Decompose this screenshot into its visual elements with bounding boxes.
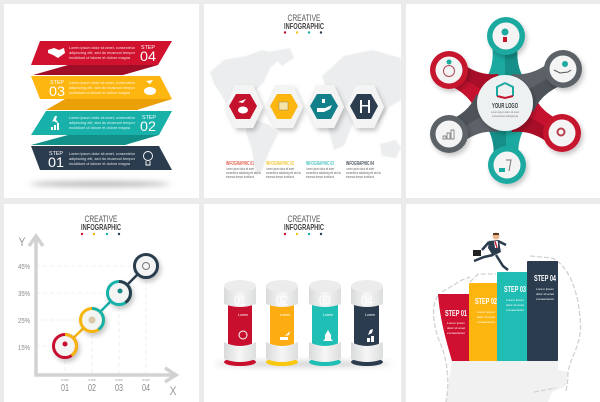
y-axis values	[18, 264, 30, 352]
ribbon step 03: yellow: Lorem ipsum dolor sit amet, consectetur	[69, 81, 136, 85]
icon: piggy bank	[144, 80, 156, 95]
heading: CREATIVE	[288, 214, 320, 224]
y-axis values: 35%	[18, 291, 30, 298]
node: bottom teal	[488, 146, 526, 184]
ribbon step 03: yellow: incididunt ut labore et dolore magna	[69, 91, 130, 95]
node: bottom-right red	[543, 114, 581, 152]
node: top-left red	[430, 51, 468, 89]
text column 01: INFOGRAPHIC 01	[226, 161, 254, 167]
ribbon step 02: teal: incididunt ut labore et dolore magna	[69, 126, 130, 130]
cylinder 01: Lorem	[238, 313, 248, 317]
running businessman	[473, 232, 508, 270]
icon: runner on bars	[51, 116, 59, 130]
x-axis values: 02	[88, 383, 96, 394]
world map	[210, 48, 401, 176]
icon: piggy	[280, 331, 290, 340]
x-axis step captions: STEP	[61, 378, 69, 382]
bar step 01: Lorem ipsum	[447, 321, 466, 325]
text column 02: eiusmod tempor incididunt	[266, 175, 294, 179]
y-axis values: 45%	[18, 264, 30, 271]
cylinder 02	[266, 280, 298, 366]
x-axis step captions: STEP	[142, 378, 150, 382]
hexagon 03	[306, 85, 344, 128]
bar step 01	[438, 294, 471, 361]
cylinder 02: Lorem	[280, 313, 290, 317]
ribbon step 01: dark	[31, 146, 172, 170]
heading: INFOGRAPHIC	[284, 21, 324, 31]
y-axis values: 25%	[18, 318, 30, 325]
bar step 04: Lorem ipsum	[536, 287, 555, 291]
arm: grey lower left	[442, 94, 499, 152]
bar step 02: STEP 02	[475, 297, 497, 306]
ribbon fold: red	[33, 65, 158, 75]
doodle head outline	[434, 256, 581, 402]
ribbon step 02: teal: STEP	[142, 115, 156, 121]
axis label X: X	[170, 384, 176, 398]
ribbon step 03: yellow	[31, 76, 172, 99]
ribbon step 01: dark: Lorem ipsum dolor sit amet, consectetur	[69, 152, 136, 156]
icon: calendar	[279, 102, 288, 110]
cylinder 02: 02	[276, 292, 288, 308]
icon: runner on bars	[367, 329, 374, 342]
x-axis step captions: STEP	[88, 378, 96, 382]
ribbon step 02: teal	[31, 111, 172, 135]
ribbon step 01: dark: STEP	[49, 151, 63, 157]
bar step 02: Lorem ipsum	[477, 310, 496, 314]
icon: hand with coin	[554, 61, 571, 73]
ribbon step 04: red	[31, 41, 172, 65]
hexagon 01	[225, 85, 263, 128]
node: top-right grey	[544, 50, 582, 88]
bar step 01: STEP 01	[445, 309, 467, 318]
bar step 02: consectetur	[477, 320, 495, 324]
text column 01: eiusmod tempor incididunt	[226, 175, 254, 179]
text column 02: INFOGRAPHIC 02	[266, 161, 294, 167]
ribbon step 03: yellow: STEP	[50, 80, 64, 86]
text column 03	[306, 161, 341, 179]
y-axis values: 15%	[18, 345, 30, 352]
bar step 04: dolor sit amet	[536, 292, 554, 296]
arm: teal top	[483, 43, 527, 83]
cylinder 03: 03	[319, 292, 331, 308]
x-axis values: 03	[115, 383, 123, 394]
text column 01: consectetur adipiscing elit sed do	[226, 171, 261, 175]
ribbon step 01: dark: 01	[48, 154, 64, 170]
text column 04: eiusmod tempor incididunt	[346, 175, 374, 179]
text column 03: INFOGRAPHIC 03	[306, 161, 334, 167]
arm: grey upper right	[511, 54, 568, 112]
cylinder 01	[224, 280, 256, 366]
x-axis values: 04	[142, 383, 150, 394]
ribbon step 02: teal: Lorem ipsum dolor sit amet, consectetur	[69, 116, 136, 120]
text column 04	[346, 161, 381, 179]
ribbon step 02: teal: 02	[140, 118, 156, 134]
cylinder 03	[309, 280, 341, 366]
data point 01	[54, 334, 77, 358]
text column 03: Lorem ipsum dolor sit amet	[306, 167, 334, 171]
text column 03: consectetur adipiscing elit sed do	[306, 171, 341, 175]
text column 01	[226, 161, 261, 179]
heading	[284, 13, 324, 34]
center logo disc: YOUR LOGO	[492, 103, 518, 110]
text column 02: Lorem ipsum dolor sit amet	[266, 167, 294, 171]
icon: head gear	[558, 128, 564, 136]
bar step 04: STEP 04	[534, 274, 556, 283]
ribbon fold: yellow	[46, 99, 172, 110]
ribbon step 04: red: 04	[140, 48, 156, 64]
icon: bulb	[239, 331, 247, 339]
cylinder 04: 04	[361, 292, 373, 308]
panel: line chart	[4, 204, 199, 402]
ribbon step 02: teal: adipiscing elit, sed do eiusmod tempor	[69, 121, 136, 125]
bar step 03: dolor sit amet	[506, 303, 524, 307]
cylinder 03: Lorem	[323, 313, 333, 317]
icon: rocket	[323, 330, 333, 341]
cylinder 01: 01	[234, 292, 246, 308]
center logo disc: Lorem ipsum dolor sit amet	[491, 110, 519, 114]
arm: red lower right	[511, 94, 568, 152]
panel: world map hexagons	[204, 4, 401, 198]
heading: CREATIVE	[288, 13, 320, 23]
heading: INFOGRAPHIC	[81, 222, 121, 232]
bar step 01: dolor sit amet	[447, 326, 465, 330]
axes	[29, 236, 176, 382]
bar step 03: consectetur	[506, 308, 524, 312]
connector segments	[65, 266, 146, 346]
ribbon step 01: dark: incididunt ut labore et dolore magna	[69, 162, 130, 166]
node: top teal	[487, 17, 525, 55]
head silhouette base	[446, 361, 568, 402]
panel: head steps	[406, 204, 600, 402]
arm: teal bottom	[484, 123, 528, 163]
hexagon 04	[346, 85, 384, 128]
panel: ribbon steps	[4, 4, 199, 198]
cylinder 04: Lorem	[365, 313, 375, 317]
icon: medal	[502, 28, 508, 42]
text column 02	[266, 161, 301, 179]
text column 04: INFOGRAPHIC 04	[346, 161, 374, 167]
icon: light bulb	[144, 152, 152, 165]
x-axis step captions: STEP	[115, 378, 123, 382]
icon: piggy bank	[238, 99, 248, 114]
heading	[81, 214, 121, 235]
arm: red upper left	[442, 54, 499, 112]
heading	[284, 214, 324, 235]
ribbon step 04: red: incididunt ut labore et dolore magna	[69, 56, 130, 60]
bar step 01: consectetur	[447, 331, 465, 335]
icon: person with case	[499, 160, 511, 172]
heading: INFOGRAPHIC	[284, 222, 324, 232]
icon: gear with coin	[444, 60, 454, 76]
cylinder 04	[351, 280, 383, 366]
x-axis values	[61, 383, 150, 394]
text column 04: consectetur adipiscing elit sed do	[346, 171, 381, 175]
data point 03	[108, 282, 131, 304]
panel: metaball diagram	[406, 4, 600, 198]
ribbon step 04: red: STEP	[141, 45, 155, 51]
ribbon step 04: red: Lorem ipsum dolor sit amet, consectetur	[69, 46, 136, 50]
x-axis values: 01	[61, 383, 69, 394]
bar step 02: dolor sit amet	[477, 315, 495, 319]
bar step 03	[497, 272, 528, 361]
bar step 02	[469, 283, 499, 361]
center logo disc	[477, 75, 533, 131]
x-axis step captions	[61, 378, 150, 382]
data point 04	[134, 254, 158, 278]
icon: two people	[360, 100, 370, 113]
heading: CREATIVE	[84, 214, 118, 224]
axis label Y: Y	[18, 235, 26, 249]
data point 02	[80, 308, 104, 332]
logo star	[497, 83, 513, 98]
ribbon step 03: yellow: 03	[49, 83, 65, 99]
text column 02: consectetur adipiscing elit sed do	[266, 171, 301, 175]
bar step 03: Lorem ipsum	[506, 298, 525, 302]
node: bottom-left grey	[430, 115, 468, 153]
center logo disc: consectetur adipiscing	[492, 114, 518, 118]
text column 03: eiusmod tempor incididunt	[306, 175, 334, 179]
text column 04: Lorem ipsum dolor sit amet	[346, 167, 374, 171]
bar step 04: consectetur	[536, 297, 554, 301]
text column 01: Lorem ipsum dolor sit amet	[226, 167, 254, 171]
shadow under ribbons	[30, 182, 170, 186]
floor shadow	[215, 361, 391, 367]
icon: hand with coin	[317, 99, 332, 112]
hexagon 02	[265, 85, 303, 128]
ribbon step 04: red: adipiscing elit, sed do eiusmod tempor	[69, 51, 136, 55]
icon: chart	[443, 130, 454, 139]
ribbon fold: teal	[31, 135, 159, 145]
ribbon step 03: yellow: adipiscing elit, sed do eiusmod tempor	[69, 86, 136, 90]
bar step 03: STEP 03	[504, 285, 526, 294]
ribbon step 01: dark: adipiscing elit, sed do eiusmod tempor	[69, 157, 136, 161]
bar step 04	[527, 261, 558, 361]
panel: cylinders	[204, 204, 401, 402]
icon: handshake	[48, 48, 65, 58]
